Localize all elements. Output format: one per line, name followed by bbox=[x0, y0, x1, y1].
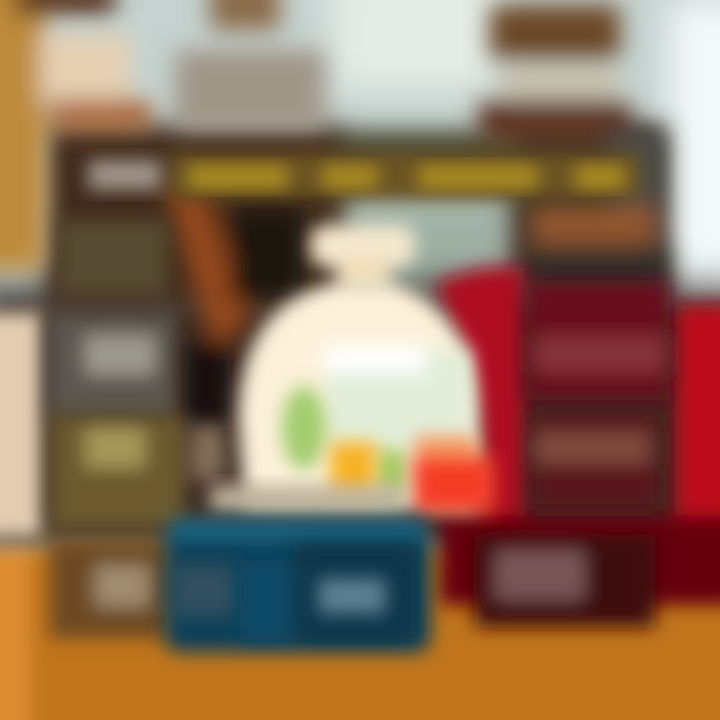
yellow block bbox=[330, 442, 376, 497]
card: upper red bbox=[525, 280, 670, 400]
green leaf bbox=[282, 386, 407, 495]
bag light panel bbox=[325, 345, 470, 450]
bag body bbox=[238, 282, 478, 510]
banner highlights bbox=[188, 166, 625, 188]
card: upper grey bbox=[48, 220, 176, 417]
wall strip left bbox=[0, 312, 42, 537]
red backdrop right bbox=[435, 267, 720, 605]
central money bag bbox=[210, 225, 495, 513]
red block bbox=[413, 436, 495, 513]
box dark recess bbox=[240, 545, 415, 640]
bag neck bbox=[310, 225, 415, 290]
background: bright room bbox=[0, 0, 720, 550]
left column cards bbox=[48, 220, 224, 638]
table surface bbox=[0, 548, 720, 720]
title banner bbox=[88, 152, 640, 198]
card: olive bbox=[50, 415, 224, 530]
bag base shade bbox=[210, 485, 405, 513]
card: bottom dark bbox=[475, 535, 655, 627]
right column cards bbox=[475, 280, 670, 627]
box left tile bbox=[172, 565, 237, 617]
banner grey tag bbox=[88, 160, 162, 190]
person middle bbox=[165, 0, 325, 430]
card: brown bbox=[50, 540, 170, 638]
card: lower red bbox=[530, 412, 660, 510]
box right tile bbox=[318, 578, 386, 614]
box body bbox=[165, 518, 430, 652]
person right bbox=[480, 5, 670, 295]
dark mass behind left figures bbox=[45, 125, 665, 310]
teal base box bbox=[165, 518, 430, 652]
person left bbox=[0, 0, 150, 270]
banner band bbox=[170, 152, 640, 198]
